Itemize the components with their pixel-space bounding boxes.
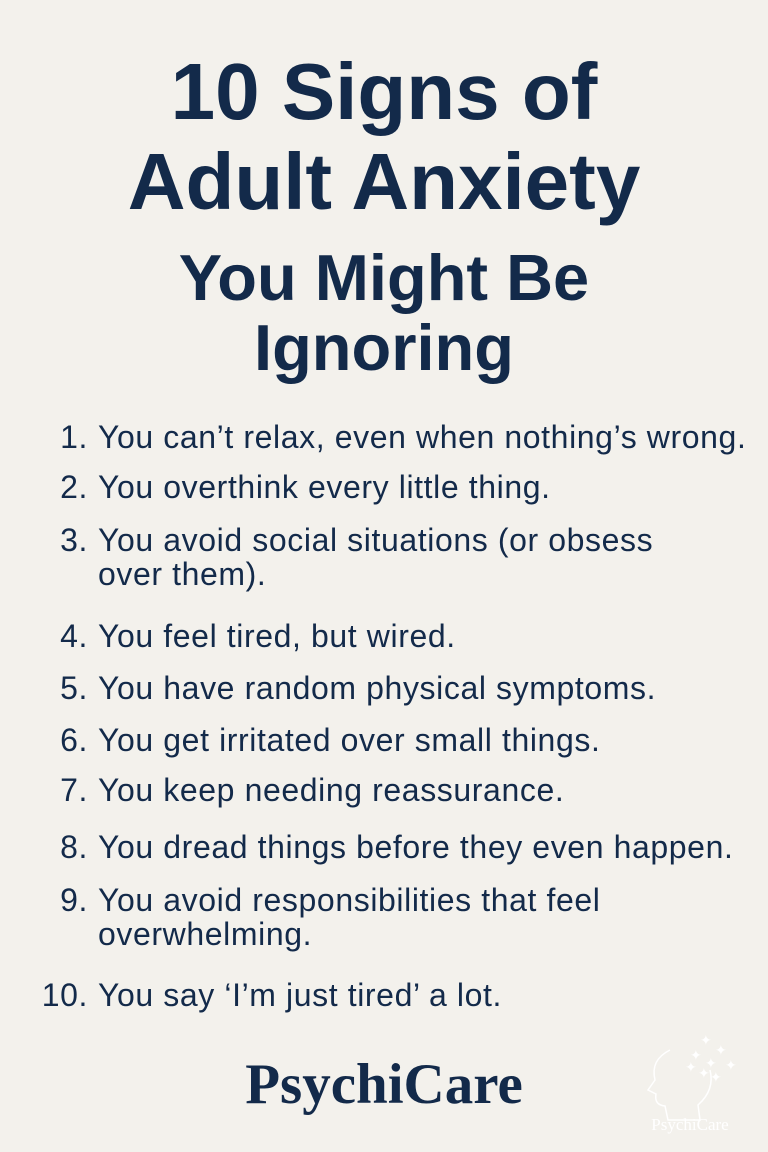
watermark logo: ✦ [705,1056,717,1072]
watermark logo: ✦ [685,1060,697,1076]
title [128,47,640,384]
watermark logo [647,1033,737,1134]
list of signs: 2. [60,469,88,505]
list of signs: 4. [60,618,88,654]
list of signs: You feel tired, but wired. [98,618,456,654]
list of signs: You avoid social situations (or obsess [98,522,653,558]
watermark logo: ✦ [698,1066,710,1082]
watermark logo: ✦ [710,1070,722,1086]
list of signs: You overthink every little thing. [98,469,551,505]
title: You Might Be [179,241,589,314]
list of signs: 8. [60,829,88,865]
list of signs: You can’t relax, even when nothing’s wrong. [98,419,746,455]
list of signs: 9. [60,882,88,918]
title: Ignoring [254,311,514,384]
list of signs: 5. [60,670,88,706]
title: 10 Signs of [171,47,597,136]
list of signs: You say ‘I’m just tired’ a lot. [98,977,502,1013]
list of signs: You dread things before they even happen. [98,829,733,865]
list of signs: 10. [42,977,88,1013]
list of signs [42,419,746,1013]
title: Adult Anxiety [128,137,640,226]
list of signs: You have random physical symptoms. [98,670,656,706]
list of signs: You avoid responsibilities that feel [98,882,601,918]
watermark logo: ✦ [690,1048,702,1064]
watermark logo: ✦ [715,1043,727,1059]
watermark logo: ✦ [725,1058,737,1074]
list of signs: 1. [60,419,88,455]
list of signs: You keep needing reassurance. [98,772,564,808]
list of signs: 6. [60,722,88,758]
watermark logo: ✦ [700,1033,712,1049]
list of signs: You get irritated over small things. [98,722,600,758]
list of signs: 3. [60,522,88,558]
brand name: PsychiCare [245,1053,523,1116]
list of signs: overwhelming. [98,916,312,952]
list of signs: 7. [60,772,88,808]
list of signs: over them). [98,556,266,592]
watermark logo: PsychiCare [651,1115,729,1134]
